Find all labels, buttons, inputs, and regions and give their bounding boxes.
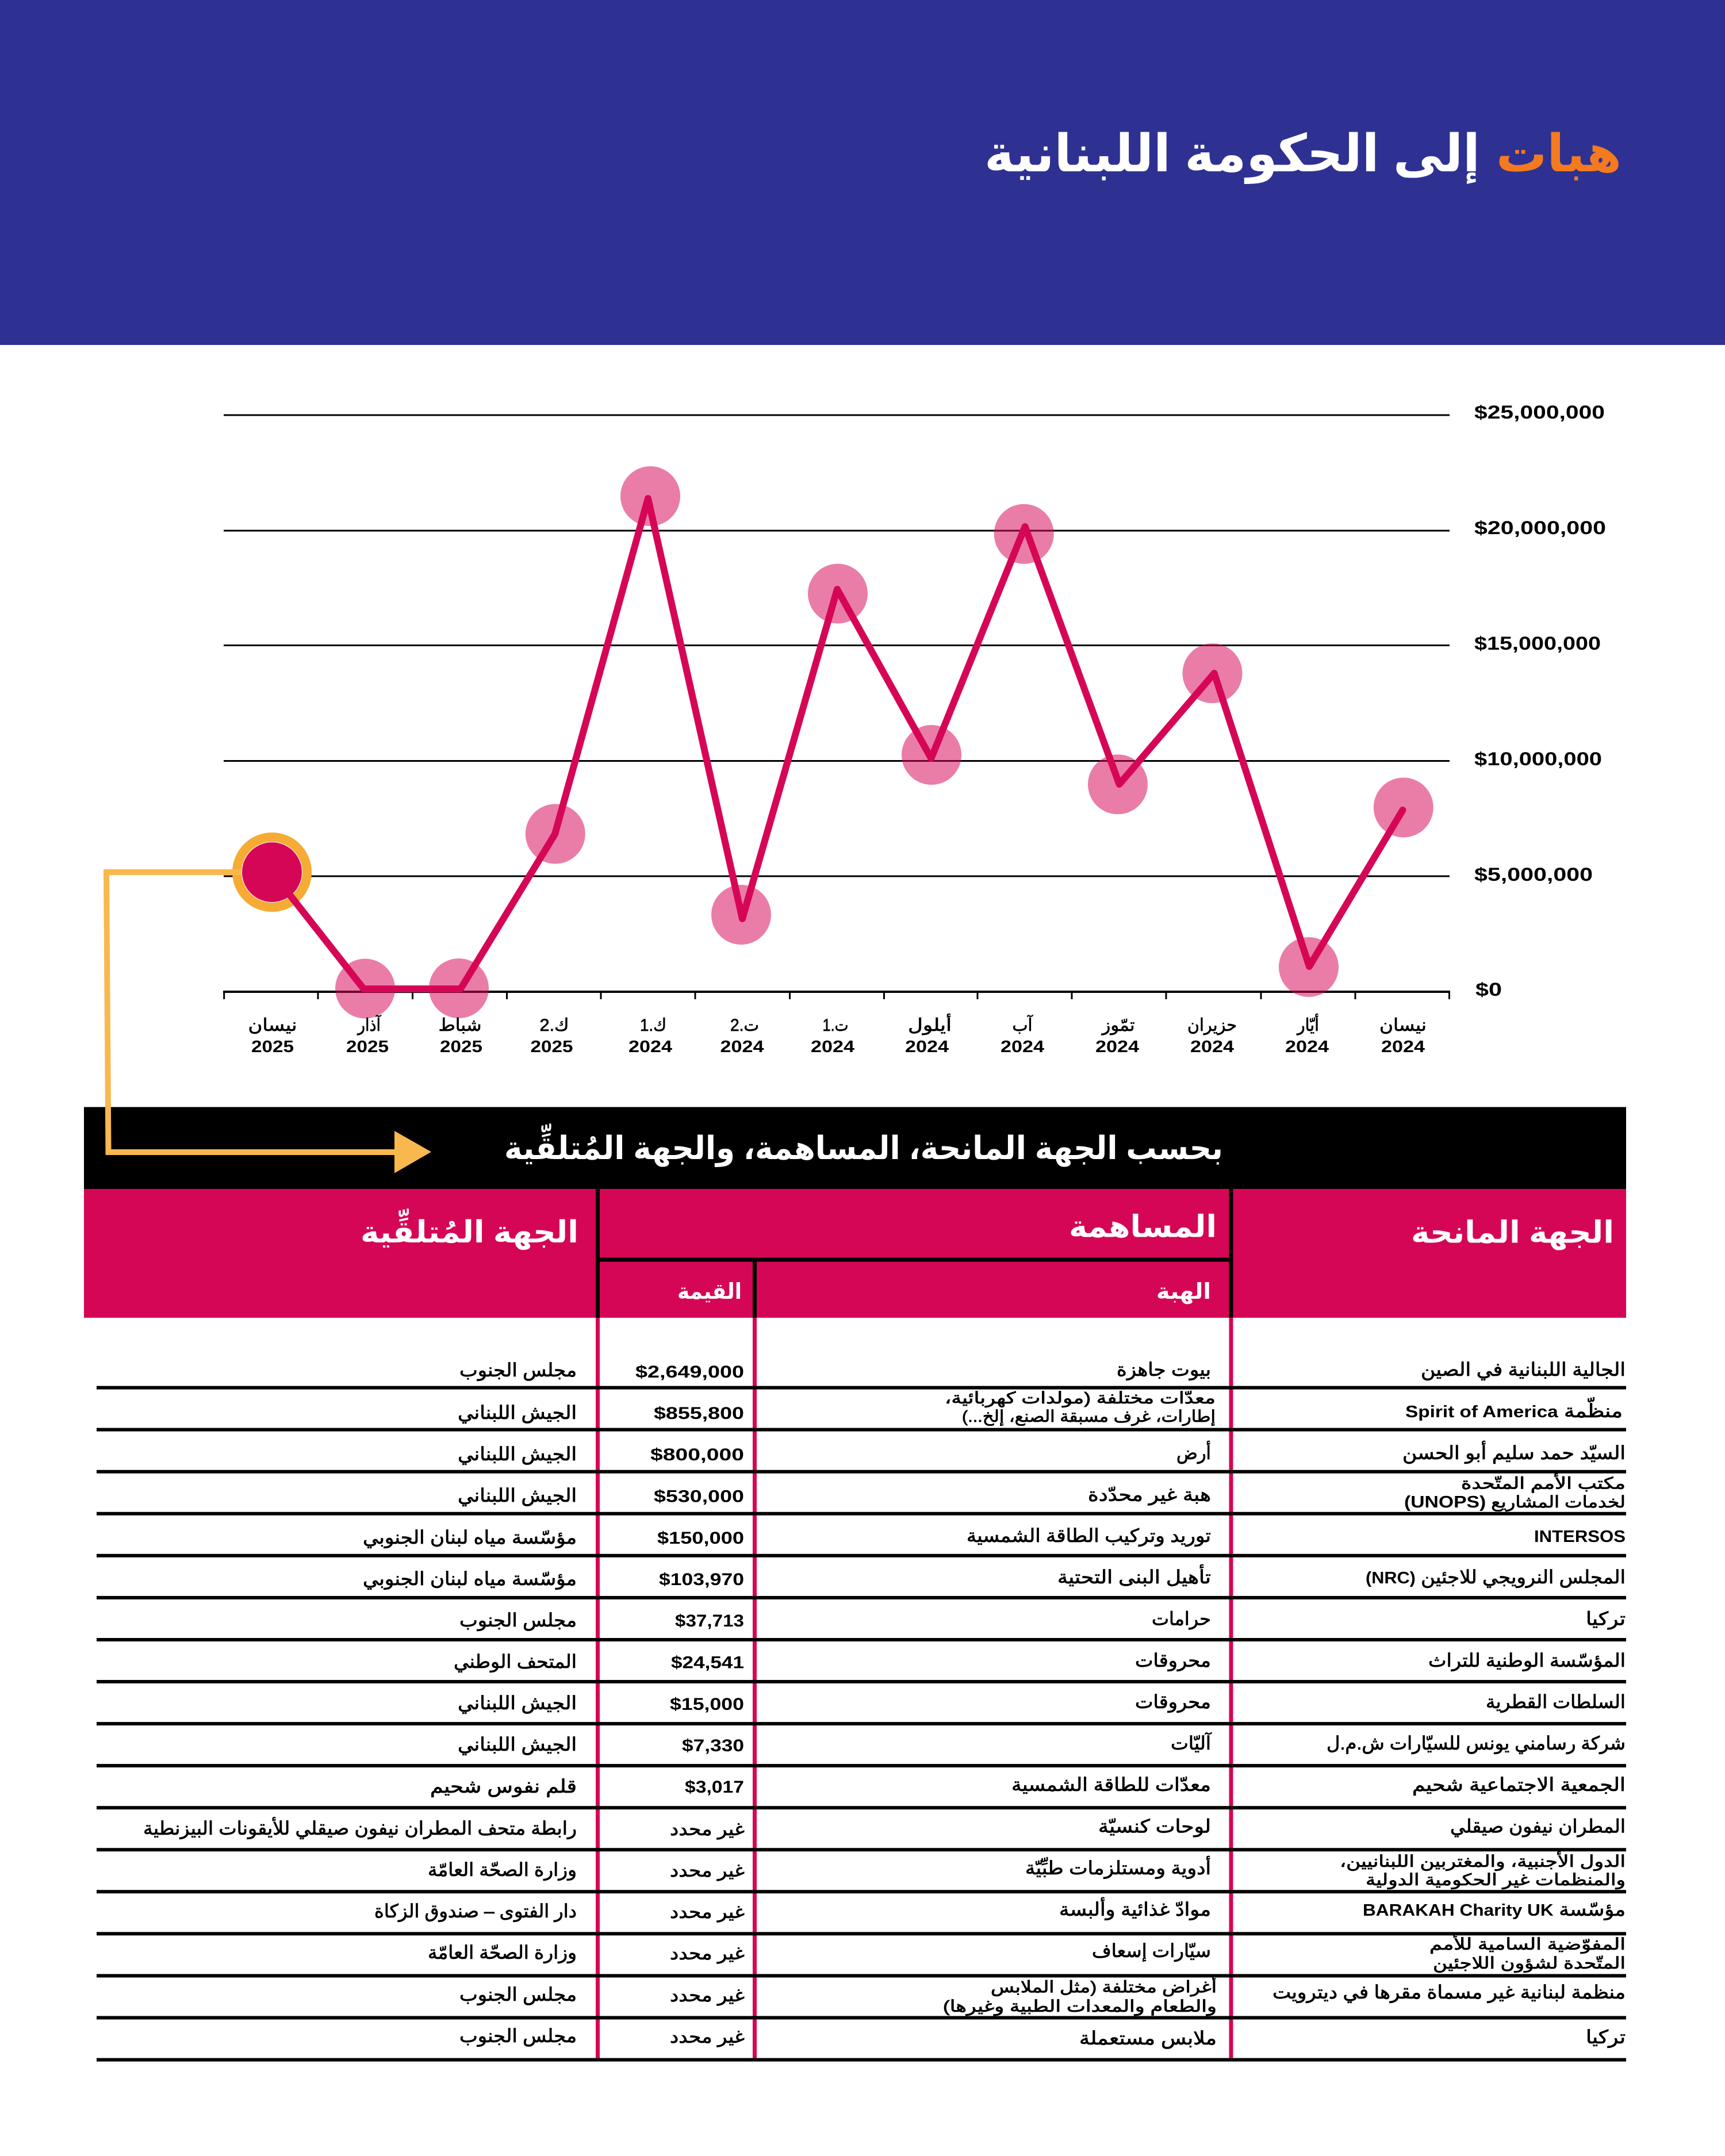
month labels — [248, 1013, 1427, 1056]
row 8: محروقات — [1135, 1650, 1211, 1671]
row 14: غير محدد — [670, 1902, 745, 1923]
month labels: 2024 — [628, 1038, 672, 1056]
y axis labels — [1474, 402, 1606, 1000]
header: value: القيمة — [677, 1280, 742, 1304]
row 2: منظّمة Spirit of America — [1405, 1397, 1623, 1421]
row 9: $15,000 — [670, 1695, 744, 1714]
row 15: المتّحدة لشؤون اللاجئين — [1433, 1954, 1626, 1973]
row 14 — [374, 1897, 1626, 1923]
row 16 — [459, 1975, 1626, 2016]
row 13: الدول الأجنبية، والمغتربين اللبنانيين، — [1340, 1851, 1626, 1871]
table rows — [143, 1359, 1626, 2048]
row 8: المؤسّسة الوطنية للتراث — [1428, 1650, 1626, 1671]
row 4: الجيش اللبناني — [458, 1485, 577, 1506]
month labels: آب — [1012, 1015, 1033, 1035]
row 13 — [428, 1851, 1626, 1889]
y axis labels: $25,000,000 — [1474, 402, 1605, 423]
row 17: مجلس الجنوب — [459, 2025, 577, 2047]
row 3: $800,000 — [650, 1445, 744, 1464]
row 1: $2,649,000 — [635, 1363, 744, 1382]
row 7: حرامات — [1152, 1609, 1211, 1629]
row 12: لوحات كنسيّة — [1098, 1816, 1211, 1837]
row 10: الجيش اللبناني — [458, 1734, 577, 1755]
row 16: منظمة لبنانية غير مسماة مقرها في ديترويت — [1272, 1982, 1626, 2003]
row 15: وزارة الصحّة العامّة — [428, 1942, 577, 1963]
row 5: INTERSOS — [1534, 1528, 1626, 1546]
row 10 — [458, 1732, 1626, 1755]
table heading band — [84, 1107, 1626, 1189]
row 1: الجالية اللبنانية في الصين — [1421, 1359, 1626, 1380]
row 2: الجيش اللبناني — [458, 1402, 577, 1424]
title: إلى الحكومة اللبنانية — [984, 125, 1480, 184]
data line — [272, 498, 1403, 989]
table heading band: بحسب الجهة المانحة، المساهمة، والجهة المُتلقِّية — [504, 1123, 1223, 1167]
row 2 — [458, 1389, 1623, 1426]
row 11 — [430, 1774, 1626, 1797]
row 2: $855,800 — [654, 1404, 744, 1423]
month labels: أيلول — [908, 1013, 952, 1035]
month labels: 2024 — [905, 1038, 949, 1056]
row 8: المتحف الوطني — [454, 1651, 577, 1672]
row 9: محروقات — [1135, 1691, 1211, 1713]
row 16: أغراض مختلفة (مثل الملابس — [991, 1975, 1217, 1996]
row 12: المطران نيفون صيقلي — [1450, 1816, 1626, 1837]
y axis labels: $20,000,000 — [1474, 517, 1606, 538]
row 5: توريد وتركيب الطاقة الشمسية — [967, 1525, 1211, 1547]
row 17: ملابس مستعملة — [1079, 2028, 1217, 2048]
row 13: وزارة الصحّة العامّة — [428, 1859, 577, 1881]
month labels: 2024 — [720, 1038, 764, 1056]
month labels: 2025 — [530, 1038, 573, 1056]
month labels: أيّار — [1296, 1013, 1319, 1035]
month labels: نيسان — [1379, 1016, 1427, 1035]
month labels: 2025 — [440, 1038, 482, 1056]
row 7: تركيا — [1586, 1609, 1626, 1629]
month labels: 2024 — [811, 1038, 854, 1056]
y axis labels: $10,000,000 — [1474, 749, 1602, 769]
row 9 — [458, 1691, 1626, 1714]
row 12: غير محدد — [670, 1819, 745, 1840]
month labels: 2024 — [1000, 1038, 1044, 1056]
row 15: المفوّضية السامية للأمم — [1429, 1934, 1626, 1954]
row 2: إطارات، غرف مسبقة الصنع، إلخ...) — [962, 1407, 1216, 1426]
row 15 — [428, 1934, 1626, 1973]
header: gift: الهبة — [1156, 1280, 1211, 1304]
row 11: قلم نفوس شحيم — [430, 1776, 577, 1797]
month labels: آذار — [356, 1015, 381, 1035]
row 13: والمنظمات غير الحكومية الدولية — [1366, 1871, 1626, 1889]
highlighted data point — [242, 842, 302, 902]
row 4: هبة غير محدّدة — [1088, 1484, 1211, 1505]
row 5 — [363, 1525, 1626, 1548]
row 14: موادّ غذائية وألبسة — [1059, 1897, 1211, 1920]
month labels: ت.2 — [730, 1016, 759, 1035]
row 17 — [459, 2025, 1626, 2048]
y axis labels: $5,000,000 — [1474, 864, 1593, 885]
row 4: مكتب الأمم المتّحدة — [1461, 1473, 1626, 1493]
row 12: رابطة متحف المطران نيفون صيقلي للأيقونات البيزنطية — [143, 1817, 577, 1839]
row 7 — [459, 1609, 1626, 1631]
month labels: حزيران — [1187, 1016, 1237, 1035]
row 16: والطعام والمعدات الطبية وغيرها) — [943, 1997, 1217, 2016]
row 12 — [143, 1816, 1626, 1840]
row 6: $103,970 — [659, 1570, 744, 1589]
month labels: ك.1 — [640, 1016, 666, 1035]
row 8 — [454, 1650, 1626, 1672]
row 4 — [458, 1473, 1626, 1511]
row 3: الجيش اللبناني — [458, 1444, 577, 1465]
x axis with ticks — [223, 992, 1450, 999]
month labels: ك.2 — [539, 1016, 569, 1035]
month labels: نيسان — [248, 1016, 297, 1035]
row 15: سيّارات إسعاف — [1092, 1940, 1211, 1962]
row 5: $150,000 — [657, 1529, 744, 1548]
row 10: آليّات — [1171, 1732, 1212, 1754]
row 9: الجيش اللبناني — [458, 1693, 577, 1714]
row 7: $37,713 — [675, 1612, 744, 1631]
month labels: 2025 — [251, 1038, 294, 1056]
row 3 — [458, 1441, 1626, 1465]
row 13: غير محدد — [670, 1860, 745, 1881]
row 10: شركة رسامني يونس للسيّارات ش.م.ل — [1327, 1733, 1626, 1754]
row 6: مؤسّسة مياه لبنان الجنوبي — [363, 1568, 577, 1590]
table column headers — [84, 1189, 1626, 1318]
month labels: 2024 — [1285, 1038, 1329, 1056]
y axis labels: $15,000,000 — [1474, 633, 1601, 654]
row 1: مجلس الجنوب — [459, 1360, 577, 1381]
row 14: مؤسّسة BARAKAH Charity UK — [1363, 1899, 1626, 1920]
row 4: لخدمات المشاريع (UNOPS) — [1404, 1493, 1626, 1511]
row 11: $3,017 — [685, 1778, 744, 1797]
month labels: 2024 — [1190, 1038, 1234, 1056]
row 8: $24,541 — [671, 1654, 744, 1672]
row 3: أرض — [1176, 1441, 1211, 1464]
connector arrow — [106, 872, 431, 1173]
row 13: أدوية ومستلزمات طبِّيّة — [1025, 1856, 1211, 1879]
row 3: السيّد حمد سليم أبو الحسن — [1402, 1441, 1626, 1464]
row 6 — [363, 1564, 1626, 1590]
row 14: دار الفتوى – صندوق الزكاة — [374, 1901, 577, 1922]
header: donor: الجهة المانحة — [1411, 1215, 1614, 1250]
row 7: مجلس الجنوب — [459, 1610, 577, 1631]
month labels: تمّوز — [1101, 1016, 1135, 1035]
title: هبات — [1496, 125, 1621, 183]
row 16: مجلس الجنوب — [459, 1984, 577, 2005]
row 15: غير محدد — [670, 1943, 745, 1964]
header: contribution: المساهمة — [1069, 1210, 1217, 1244]
row 11: الجمعية الاجتماعية شحيم — [1412, 1774, 1626, 1795]
row 16: غير محدد — [670, 1985, 745, 2006]
table grid lines — [97, 1318, 1626, 2060]
header: recipient: الجهة المُتلقِّية — [361, 1209, 578, 1250]
highlighted point ring — [237, 837, 307, 907]
row 5: مؤسّسة مياه لبنان الجنوبي — [363, 1527, 577, 1548]
y axis labels: $0 — [1475, 979, 1502, 1000]
row 4: $530,000 — [654, 1487, 744, 1506]
line chart — [223, 402, 1606, 1056]
row 6: المجلس النرويجي للاجئين (NRC) — [1366, 1567, 1626, 1588]
row 1 — [459, 1359, 1626, 1382]
row 10: $7,330 — [682, 1736, 744, 1755]
month labels: 2025 — [346, 1038, 389, 1056]
month labels: شباط — [438, 1016, 482, 1035]
month labels: 2024 — [1381, 1038, 1425, 1056]
data point circles — [335, 466, 1433, 1019]
row 1: بيوت جاهزة — [1117, 1359, 1211, 1380]
month labels: 2024 — [1095, 1038, 1139, 1056]
month labels: ت.1 — [822, 1016, 849, 1035]
row 2: معدّات مختلفة (مولدات كهربائية، — [945, 1389, 1216, 1407]
header banner — [0, 0, 1725, 345]
row 17: تركيا — [1586, 2027, 1626, 2048]
row 9: السلطات القطرية — [1486, 1691, 1626, 1713]
row 17: غير محدد — [670, 2027, 745, 2047]
row 6: تأهيل البنى التحتية — [1057, 1564, 1211, 1587]
row 11: معدّات للطاقة الشمسية — [1011, 1774, 1211, 1795]
